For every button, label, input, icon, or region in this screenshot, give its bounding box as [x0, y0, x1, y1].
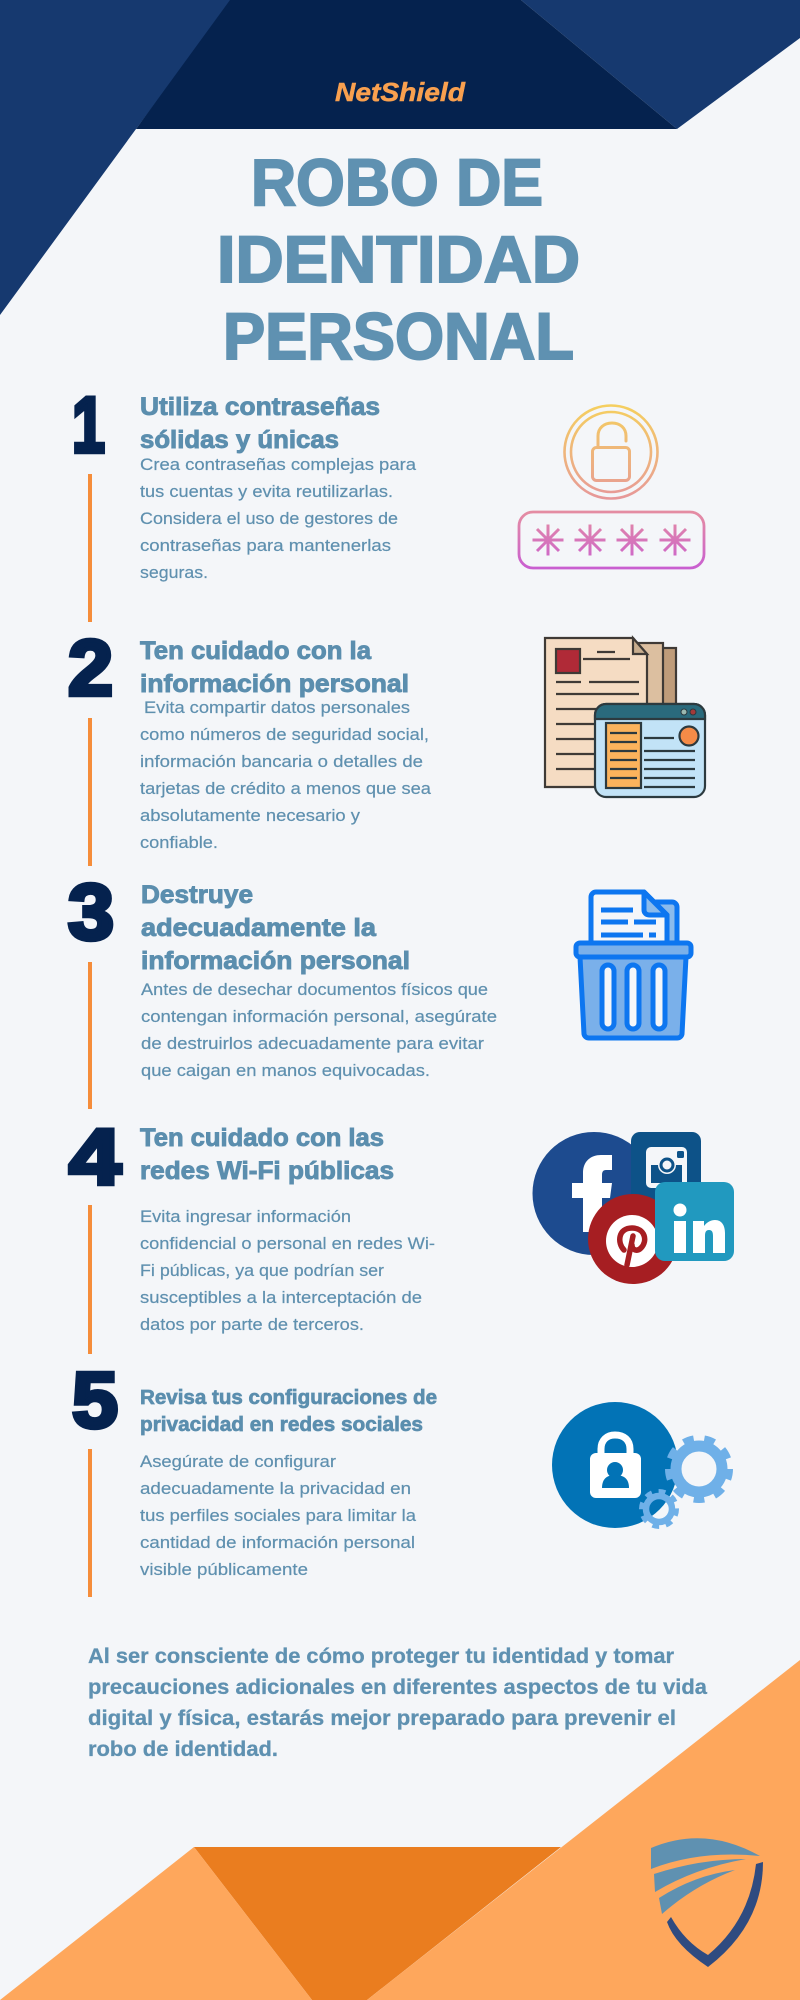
body 5: Asegúrate de configurar — [140, 1452, 336, 1471]
icon: documents and browser window — [545, 638, 705, 797]
brand name: NetShield — [335, 77, 466, 107]
body 5: adecuadamente la privacidad en — [140, 1479, 411, 1498]
icon: facebook — [532, 1132, 656, 1255]
heading 3: Destruye — [141, 881, 253, 909]
body 2: como números de seguridad social, — [140, 725, 429, 744]
body 1: Crea contraseñas complejas para — [140, 455, 417, 474]
title — [217, 145, 580, 373]
connector 4 — [88, 1205, 92, 1354]
heading 1 — [140, 393, 380, 454]
body 4: datos por parte de terceros. — [140, 1315, 364, 1334]
header shapes — [0, 0, 800, 315]
heading 3: adecuadamente la — [141, 914, 377, 942]
body 4: Evita ingresar información — [140, 1207, 351, 1226]
panel: step 2 — [68, 623, 432, 866]
number 3: 3 — [68, 867, 114, 956]
body 2: información bancaria o detalles de — [140, 752, 423, 771]
panel: step 4 — [69, 1112, 435, 1354]
body 1: seguras. — [140, 563, 208, 582]
body 5: cantidad de información personal — [140, 1533, 415, 1552]
icon: pinterest — [588, 1194, 678, 1284]
heading 3 — [141, 881, 410, 975]
body 3: que caigan en manos equivocadas. — [141, 1061, 430, 1080]
heading 4: Ten cuidado con las — [140, 1124, 384, 1152]
number 5: 5 — [72, 1355, 118, 1444]
heading 4 — [140, 1124, 394, 1185]
closing paragraph: digital y física, estarás mejor preparado para prevenir el — [88, 1707, 676, 1730]
body 2: confiable. — [140, 833, 218, 852]
heading 5: Revisa tus configuraciones de — [140, 1386, 437, 1409]
connector 2 — [88, 718, 92, 866]
body 2: Evita compartir datos personales — [144, 698, 410, 717]
heading 4: redes Wi-Fi públicas — [140, 1157, 394, 1185]
body 4: confidencial o personal en redes Wi- — [140, 1234, 435, 1253]
panel: step 3 — [68, 867, 497, 1109]
body 4: susceptibles a la interceptación de — [140, 1288, 422, 1307]
heading 2: Ten cuidado con la — [140, 637, 372, 665]
heading 2: información personal — [140, 670, 409, 698]
panel: step 1 — [72, 380, 417, 622]
icon: social networks — [532, 1132, 734, 1284]
number 4: 4 — [69, 1112, 121, 1201]
heading 3: información personal — [141, 947, 410, 975]
body 3: contengan información personal, asegúrate — [141, 1007, 497, 1026]
number 2: 2 — [68, 623, 113, 712]
connector 5 — [88, 1449, 92, 1597]
body 1: tus cuentas y evita reutilizarlas. — [140, 482, 393, 501]
body 2: absolutamente necesario y — [140, 806, 361, 825]
heading 1: Utiliza contraseñas — [140, 393, 380, 421]
heading 5 — [140, 1386, 437, 1436]
connector 1 — [88, 474, 92, 622]
icon: lock and gears — [552, 1402, 729, 1528]
icon: trash bin with document — [576, 892, 691, 1038]
heading 1: sólidas y únicas — [140, 426, 339, 454]
icon: linkedin — [655, 1182, 734, 1261]
title: IDENTIDAD — [217, 222, 580, 296]
heading 5: privacidad en redes sociales — [140, 1413, 423, 1436]
closing paragraph: robo de identidad. — [88, 1738, 278, 1761]
icon: instagram — [631, 1132, 701, 1204]
body 4 — [140, 1207, 435, 1334]
body 1: contraseñas para mantenerlas — [140, 536, 391, 555]
body 2: tarjetas de crédito a menos que sea — [140, 779, 432, 798]
closing paragraph: precauciones adicionales en diferentes aspectos de tu vida — [88, 1676, 707, 1699]
number 1: 1 — [72, 380, 105, 469]
heading 2 — [140, 637, 409, 698]
body 3: de destruirlos adecuadamente para evitar — [141, 1034, 484, 1053]
logo: shield — [651, 1838, 763, 1967]
title: ROBO DE — [251, 145, 543, 219]
title: PERSONAL — [223, 299, 574, 373]
body 5 — [140, 1452, 417, 1579]
closing paragraph: Al ser consciente de cómo proteger tu identidad y tomar — [88, 1645, 674, 1668]
body 1: Considera el uso de gestores de — [140, 509, 398, 528]
body 5: visible públicamente — [140, 1560, 308, 1579]
footer shapes — [0, 1660, 800, 2000]
closing paragraph — [88, 1645, 707, 1761]
body 4: Fi públicas, ya que podrían ser — [140, 1261, 384, 1280]
body 3 — [141, 980, 497, 1080]
body 2 — [140, 698, 432, 852]
body 3: Antes de desechar documentos físicos que — [141, 980, 488, 999]
panel: step 5 — [72, 1355, 437, 1597]
connector 3 — [88, 962, 92, 1109]
body 1 — [140, 455, 417, 582]
icon: padlock and password — [519, 406, 704, 568]
body 5: tus perfiles sociales para limitar la — [140, 1506, 417, 1525]
